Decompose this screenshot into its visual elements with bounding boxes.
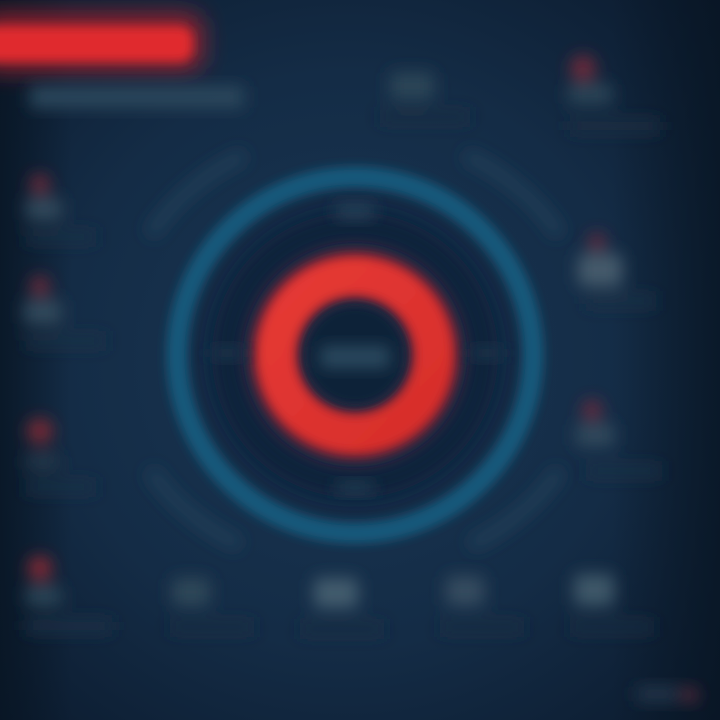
right item 1 [578,233,656,306]
header banner [0,14,202,70]
bottom item 4 [570,574,654,632]
bottom item 2 [300,578,384,634]
left item 2 [24,276,106,346]
outer faint arcs [150,155,560,545]
inner dark disc [185,185,525,525]
left item 3 [26,418,96,492]
ring marker top [336,203,374,219]
red ring glow [275,275,435,435]
centre disc [305,305,405,405]
top item centre [380,72,470,122]
teal outer ring [177,177,533,533]
dark band around red ring [227,227,483,483]
right item 2 [576,400,662,476]
red ring [276,276,434,434]
footer logo [636,686,698,703]
left item 1 [26,174,96,242]
centre label [320,346,390,368]
ring marker left [210,347,244,359]
ring marker right [470,347,504,359]
top item right [568,55,660,132]
bottom item 3 [440,576,524,632]
ring marker bottom [336,482,374,494]
subtitle [30,86,244,108]
bottom item 1 [170,578,254,632]
left item 4 [26,556,112,632]
donut chart [177,177,533,533]
